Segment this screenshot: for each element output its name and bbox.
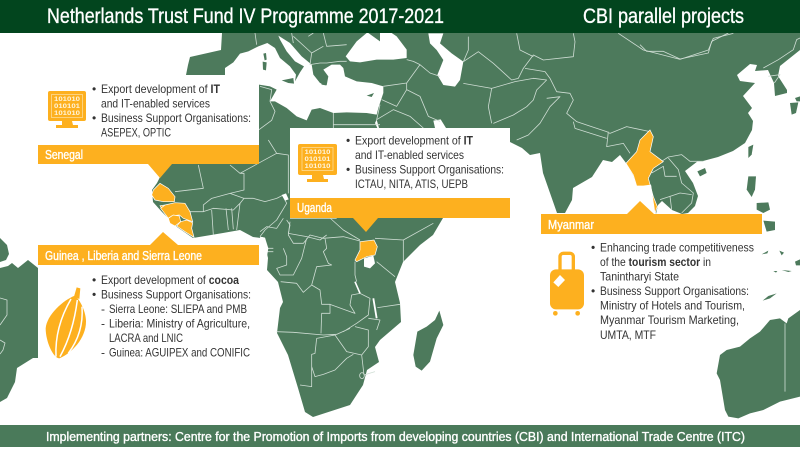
text: cocoa project details: • [92, 288, 96, 302]
text: Senegal project details: and IT-enabled services [101, 96, 210, 110]
Asian islands [697, 96, 800, 213]
country borders: Central and South Asia [463, 33, 733, 153]
text: cocoa project details: - [101, 346, 105, 360]
text: Senegal project details: Business Support Organisations: [101, 111, 251, 125]
text: Uganda project details: and IT-enabled services [355, 148, 464, 162]
text: cocoa project details: Export development of cocoa [101, 273, 239, 287]
text: cocoa project details: - [101, 302, 105, 316]
icon: cocoa pod [46, 287, 86, 358]
text: cocoa project details: • [92, 273, 96, 287]
Madagascar [413, 311, 443, 371]
icon: computer monitor: 010101 [54, 103, 80, 110]
icon: computer monitor: 101010 [304, 149, 331, 156]
text: Myanmar project details: Tanintharyi State [600, 270, 679, 284]
text: cocoa project details: Liberia: Ministry of Agriculture, [109, 316, 250, 330]
text: Uganda project details: ICTAU, NITA, ATIS, UEPB [355, 177, 468, 191]
text: cocoa project details: - [101, 316, 105, 330]
label bar: Guinea, Liberia and Sierra Leone: Guinea , Liberia and Sierra Leone [45, 248, 202, 263]
panel: Guinea, Liberia and Sierra Leone [38, 232, 259, 365]
highlighted country: Myanmar [626, 130, 663, 213]
highlighted country: Senegal, Guinea, Liberia, Sierra Leone [152, 183, 194, 237]
footer: implementing partners: Implementing partners: Centre for the Promotion of Imports from developing countries (CBI) and International Trade Centre (ITC) [46, 430, 745, 444]
South America [0, 238, 38, 402]
icon: computer monitor [298, 144, 337, 182]
text: cocoa project details: Sierra Leone: SLIEPA and PMB [109, 302, 247, 316]
label bar: Uganda [290, 198, 510, 232]
text: cocoa project details: LACRA and LNIC [109, 331, 183, 345]
label bar: Myanmar [541, 201, 762, 234]
text: Myanmar project details: Myanmar Tourism Marketing, [600, 313, 739, 327]
text: Myanmar project details: • [591, 284, 595, 298]
label bar: Uganda: Uganda [297, 200, 333, 215]
label bar: Senegal: Senegal [45, 147, 83, 162]
Mediterranean islands [263, 53, 374, 97]
icon: computer monitor: 101010 [54, 96, 80, 103]
title: CBI parallel projects: CBI parallel projects [583, 5, 744, 28]
country borders: Eastern and Southern Africa [260, 215, 433, 387]
text: Myanmar project details: of the tourism sector in [600, 255, 711, 269]
text: Senegal project details: Export development of IT [101, 82, 221, 96]
panel: Myanmar [541, 201, 762, 342]
text: Senegal project details: ASEPEX, OPTIC [101, 126, 171, 140]
text: Myanmar project details: Ministry of Hotels and Tourism, [600, 298, 745, 312]
icon: computer monitor: 101010 [304, 163, 331, 170]
text: cocoa project details [92, 273, 251, 360]
text: Myanmar project details: • [591, 240, 595, 254]
label bar: Guinea, Liberia and Sierra Leone [38, 232, 259, 265]
text: Uganda project details: Export development of IT [355, 134, 474, 148]
footer: implementing partners [0, 425, 800, 447]
text: Uganda project details: • [346, 162, 350, 176]
text: Myanmar project details: Business Support Organisations: [600, 284, 749, 298]
text: cocoa project details: Business Support Organisations: [101, 288, 251, 302]
label bar: Senegal [38, 145, 259, 178]
Indonesia islands and Australia [717, 221, 800, 418]
country borders: Europe and Middle East [255, 33, 440, 130]
panel: Senegal [38, 75, 259, 178]
text: Uganda project details [346, 134, 504, 191]
landmass: Eurasia and Africa [150, 33, 800, 417]
icon: computer monitor: 101010 [54, 110, 80, 117]
text: Senegal project details: • [92, 82, 96, 96]
text: Senegal project details: • [92, 111, 96, 125]
text: Uganda project details: Business Support Organisations: [355, 162, 504, 176]
icon: computer monitor: 010101 [304, 156, 331, 163]
icon: suitcase [550, 253, 584, 316]
Caspian Sea and Persian Gulf [428, 33, 463, 128]
panel: Uganda [290, 128, 510, 232]
seas: Mediterranean and Black Sea [225, 33, 407, 128]
title: programme: Netherlands Trust Fund IV Programme 2017-2021 [47, 5, 444, 28]
text: Myanmar project details: UMTA, MTF [600, 328, 656, 342]
title bar [0, 0, 800, 33]
text: Uganda project details: • [346, 134, 350, 148]
country borders: West and Central Africa [175, 140, 337, 240]
icon: computer monitor [48, 91, 86, 128]
text: Myanmar project details: Enhancing trade competitiveness [600, 240, 754, 254]
text: Senegal project details [92, 82, 251, 140]
country borders: East and South-East Asia [640, 33, 800, 213]
text: Myanmar project details [591, 240, 754, 342]
label bar: Myanmar: Myanmar [548, 217, 595, 232]
text: cocoa project details: Guinea: AGUIPEX and CONIFIC [109, 346, 250, 360]
highlighted country: Uganda [355, 240, 377, 268]
